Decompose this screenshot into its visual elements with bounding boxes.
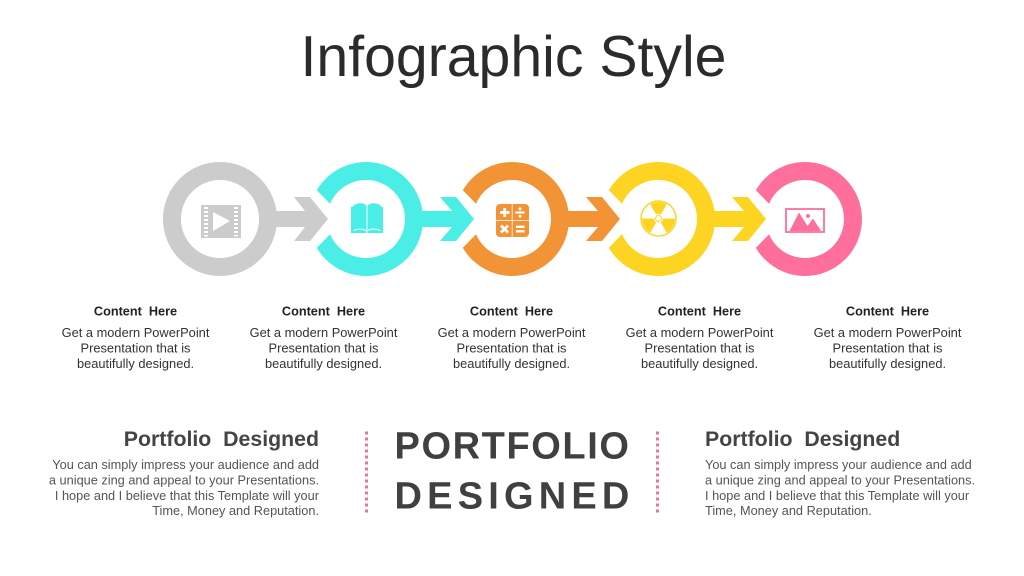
arrow 4 (713, 197, 766, 241)
title: Infographic Style (301, 25, 726, 89)
process flow (172, 171, 853, 267)
text block: column 4: Presentation that is (645, 340, 754, 356)
text block: column 5: Content Here (846, 304, 929, 318)
text block: column 3 (438, 304, 586, 371)
text block: column 1: Get a modern PowerPoint (62, 325, 210, 340)
center heading: DESIGNED (394, 476, 635, 518)
arrow 2 (421, 197, 474, 241)
icon: open book (351, 203, 383, 233)
icon: picture (786, 209, 824, 232)
center heading: PORTFOLIO (394, 426, 631, 468)
text block: column 3: Content Here (470, 304, 553, 318)
text block: column 4 (626, 304, 774, 371)
text block: column 1: Presentation that is (81, 340, 190, 356)
ring 1: grey video (172, 171, 268, 267)
arrow 1 (275, 197, 328, 241)
left portfolio text: Time, Money and Reputation. (152, 503, 319, 518)
icon: film play (201, 205, 241, 238)
left portfolio text: a unique zing and appeal to your Presentations. (49, 472, 319, 488)
ring 4: yellow radiation (591, 171, 706, 267)
right portfolio text: Time, Money and Reputation. (705, 503, 872, 518)
right portfolio text (705, 427, 975, 518)
text block: column 2: Content Here (282, 304, 365, 318)
ring 3: orange calculator (445, 171, 560, 267)
text block: column 3: Get a modern PowerPoint (438, 325, 586, 340)
text block: column 1 (62, 304, 210, 371)
text block: column 1: Content Here (94, 304, 177, 318)
ring 5: pink picture (738, 171, 853, 267)
center heading (394, 426, 635, 518)
arrow 3 (567, 197, 620, 241)
text block: column 4: Get a modern PowerPoint (626, 325, 774, 340)
text block: column 3: Presentation that is (457, 340, 566, 356)
text block: column 2 (250, 304, 398, 371)
text block: column 4: Content Here (658, 304, 741, 318)
ring 2: cyan book (299, 171, 414, 267)
right portfolio text: You can simply impress your audience and add (705, 457, 972, 472)
right portfolio text: Portfolio Designed (705, 427, 900, 451)
text block: column 2: beautifully designed. (265, 356, 382, 371)
right portfolio text: a unique zing and appeal to your Presentations. (705, 472, 975, 488)
left portfolio text: I hope and I believe that this Template will your (55, 488, 320, 503)
left portfolio text: Portfolio Designed (124, 427, 319, 451)
icon: radiation (641, 201, 676, 236)
icon: calculator (496, 204, 529, 237)
text block: column 1: beautifully designed. (77, 356, 194, 371)
left portfolio text (49, 427, 320, 518)
text block: column 3: beautifully designed. (453, 356, 570, 371)
text block: column 2: Get a modern PowerPoint (250, 325, 398, 340)
text block: column 5 (814, 304, 962, 371)
left portfolio text: You can simply impress your audience and add (52, 457, 319, 472)
text block: column 5: Get a modern PowerPoint (814, 325, 962, 340)
right portfolio text: I hope and I believe that this Template will your (705, 488, 970, 503)
text block: column 2: Presentation that is (269, 340, 378, 356)
text block: column 5: beautifully designed. (829, 356, 946, 371)
text block: column 4: beautifully designed. (641, 356, 758, 371)
text block: column 5: Presentation that is (833, 340, 942, 356)
